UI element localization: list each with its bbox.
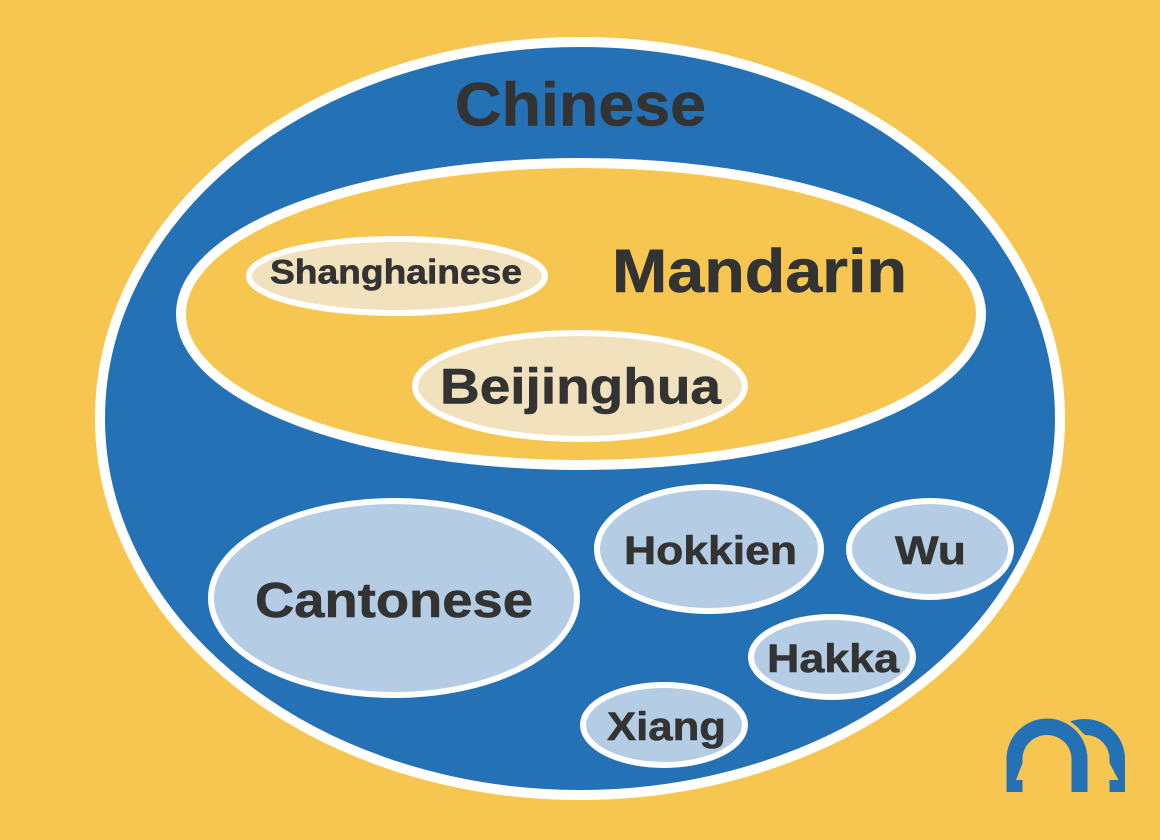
bubble: Shanghainese xyxy=(249,239,545,313)
bubble: Shanghainese: Shanghainese xyxy=(270,254,522,292)
bubble: Hakka: Hakka xyxy=(767,637,900,681)
bubble: Hakka xyxy=(751,617,913,697)
heading: Chinese: Chinese xyxy=(455,70,706,138)
bubble: Beijinghua: Beijinghua xyxy=(440,358,722,414)
bubble: Beijinghua xyxy=(415,333,745,439)
panel: Chinese outer ellipse xyxy=(100,42,1060,795)
bubble: Hokkien: Hokkien xyxy=(624,529,797,573)
bubble: Wu: Wu xyxy=(895,529,966,573)
bubble: Xiang: Xiang xyxy=(607,705,726,749)
panel: Mandarin ellipse xyxy=(181,163,981,465)
icon: two-heads logo xyxy=(1006,717,1125,792)
bubble: Cantonese: Cantonese xyxy=(255,574,533,628)
bubble: Cantonese xyxy=(211,501,577,695)
bubble: Hokkien xyxy=(597,487,821,611)
bubble: Wu xyxy=(849,501,1011,597)
bubble: Xiang xyxy=(583,685,745,765)
heading: Mandarin: Mandarin xyxy=(612,237,907,305)
